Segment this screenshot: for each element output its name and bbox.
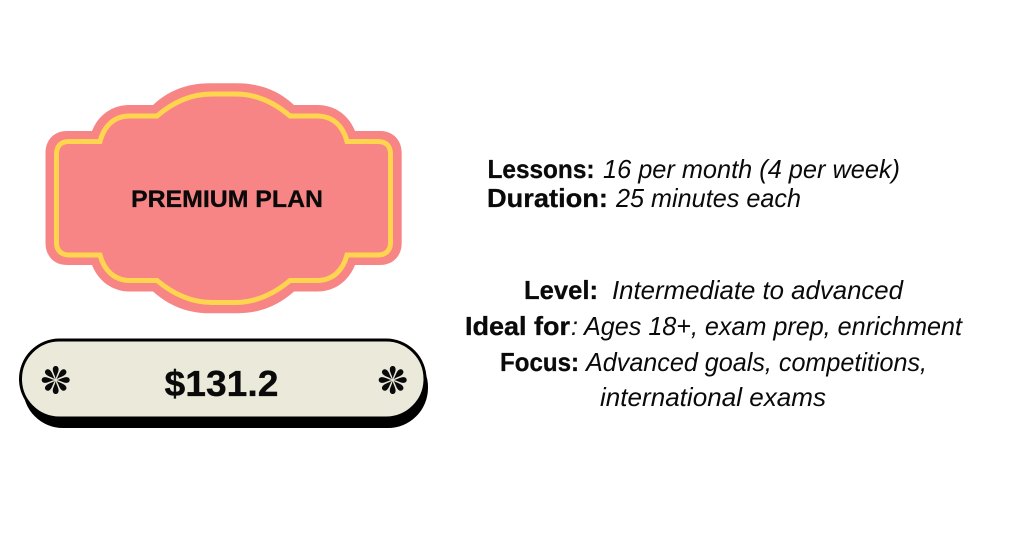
focus line: Focus: bbox=[500, 347, 579, 377]
badge shape bbox=[46, 83, 402, 313]
badge: premium plan bbox=[46, 83, 402, 313]
duration line: 25 minutes each bbox=[615, 183, 801, 213]
pill shadow bbox=[23, 347, 428, 428]
badge inner outline bbox=[56, 94, 390, 302]
pill body bbox=[20, 340, 425, 418]
icon: left flower bbox=[42, 366, 70, 394]
lessons line: Lessons: bbox=[488, 154, 594, 184]
text block: lessons and duration bbox=[487, 154, 900, 213]
icon: right flower bbox=[379, 366, 407, 394]
price pill bbox=[20, 340, 428, 428]
badge title: PREMIUM PLAN bbox=[131, 186, 323, 213]
focus line: Advanced goals, competitions, bbox=[584, 347, 927, 377]
ideal for line: Ideal for bbox=[465, 311, 570, 341]
ideal for line: : Ages 18+, exam prep, enrichment bbox=[571, 311, 964, 341]
duration line bbox=[487, 183, 801, 213]
lessons line: 16 per month (4 per week) bbox=[603, 154, 900, 184]
duration line: Duration: bbox=[487, 183, 608, 213]
price: $131.2 bbox=[164, 363, 278, 404]
level line: Level: bbox=[524, 275, 598, 305]
level line: Intermediate to advanced bbox=[612, 275, 905, 305]
text block: level, ideal for, focus bbox=[465, 275, 964, 412]
focus line continued: international exams bbox=[600, 382, 826, 412]
